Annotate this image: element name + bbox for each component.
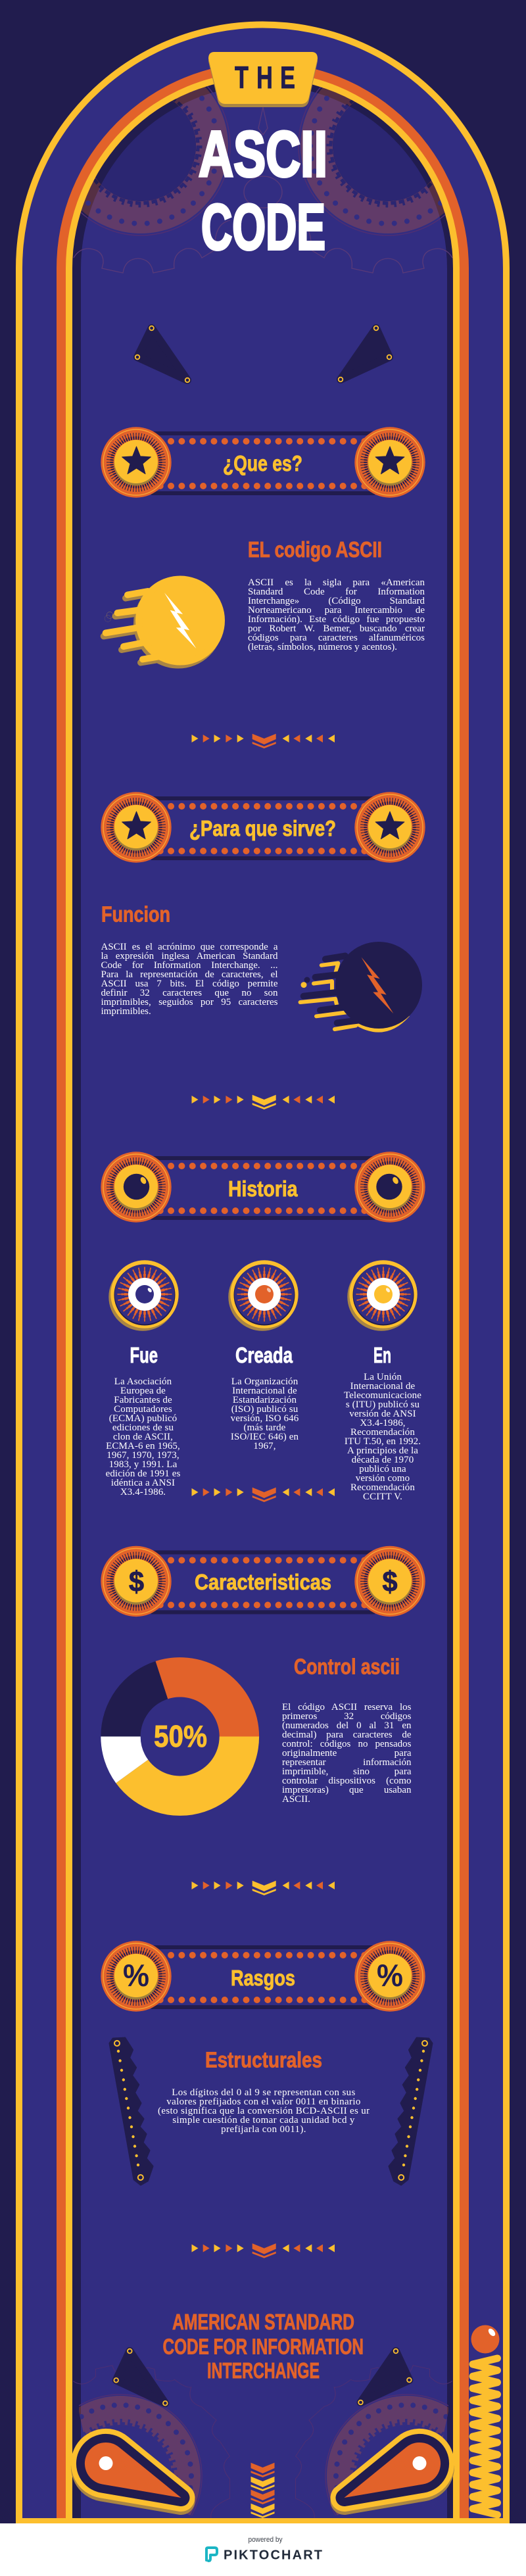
closing title: CODE FOR INFORMATION	[163, 2335, 364, 2360]
text: En	[332, 1373, 433, 1504]
text: Control ascii: imprimible, sino para	[282, 1766, 412, 1777]
text: En: versión de ANSI	[349, 1409, 416, 1419]
text: Estructurales: simple cuestión de tomar cada unidad bcd y	[172, 2115, 355, 2126]
text: Funcion: ASCII usa 7 bits. El código permite	[101, 979, 277, 989]
heading: El codigo ASCII: EL codigo ASCII	[248, 538, 382, 562]
text: Control ascii: decimal) para caracteres de	[282, 1730, 412, 1740]
closing title: INTERCHANGE	[207, 2359, 320, 2383]
text: En: Internacional de	[350, 1381, 415, 1392]
text: Control ascii: primeros 32 códigos	[282, 1711, 412, 1722]
title plate: THE	[208, 52, 318, 107]
top gears	[74, 85, 452, 274]
text: Funcion: definir 32 caracteres que no son	[101, 988, 277, 998]
title plate: THE: THE	[235, 61, 295, 95]
rail left	[110, 2038, 153, 2185]
text: El codigo ASCII: por Robert W. Bemer, buscando crear	[248, 623, 425, 634]
text: Fue: 1983, y 1991. La	[109, 1459, 177, 1470]
icon: star left	[122, 447, 151, 474]
heading: Que es: ¿Que es?	[223, 452, 302, 476]
section banner: Para que sirve	[101, 792, 425, 863]
icon: star right	[375, 447, 404, 474]
icon: dark lightning coin	[300, 942, 422, 1033]
section banner: Que es	[101, 427, 425, 498]
heading: Rasgos: Rasgos	[231, 1966, 295, 1991]
text: Control ascii: controlar dispositivos (como	[282, 1776, 412, 1786]
panel: Control ascii	[101, 1655, 412, 1816]
text: Creada: (ISO) publicó su	[231, 1404, 298, 1415]
text: Creada: versión, ISO 646	[231, 1413, 299, 1424]
text: El codigo ASCII: Standard Code for Information	[248, 587, 425, 597]
footer background	[0, 2523, 526, 2576]
text: Funcion: Code for Information Interchange. ...	[101, 960, 277, 971]
text: Estructurales: valores prefijados con el valor 0011 en binario	[166, 2097, 361, 2107]
text: Creada	[214, 1377, 316, 1453]
heading: Funcion: Funcion	[101, 903, 170, 927]
text: En: A principios de la	[347, 1446, 418, 1456]
text: Control ascii: impresoras) que usaban	[282, 1785, 412, 1795]
icon: eye right	[376, 1174, 402, 1200]
closing title	[163, 2310, 364, 2383]
heading: Control ascii: Control ascii	[294, 1655, 400, 1680]
main title: ASCII CODE	[199, 118, 327, 263]
flipper left	[85, 2442, 181, 2501]
icon: eye left	[124, 1174, 149, 1200]
text: Funcion	[101, 942, 277, 1017]
text: Creada: Internacional de	[232, 1386, 297, 1396]
text: Control ascii: representar información	[282, 1757, 412, 1768]
icon: medal yellow	[347, 1260, 418, 1331]
main title: ASCII CODE: CODE	[201, 191, 325, 263]
icon: yellow lightning coin	[104, 579, 222, 666]
text: Fue: clon de ASCII,	[113, 1432, 173, 1442]
heading: Para que sirve: ¿Para que sirve?	[189, 817, 336, 841]
text: Control ascii: ASCII.	[282, 1794, 310, 1805]
divider 3	[192, 1488, 335, 1502]
text: Fue: (ECMA) publicó	[109, 1413, 177, 1424]
divider 4	[192, 1881, 335, 1895]
text: Estructurales: prefijarla con 0011).	[221, 2124, 306, 2135]
text: En: publicó una	[359, 1464, 406, 1474]
rail right	[389, 2038, 432, 2185]
icon: star right	[375, 812, 404, 839]
column: Fue	[92, 1260, 194, 1502]
panel: Estructurales	[110, 2038, 432, 2185]
footer caption: powered by	[249, 2536, 283, 2544]
text: Funcion: imprimibles, seguidos por 95 caracteres	[101, 997, 277, 1008]
donut value: 50%	[154, 1719, 207, 1753]
heading: Historia: Historia	[228, 1177, 298, 1202]
icon: percent left: %	[123, 1958, 149, 1993]
slingshot triangle: top right	[339, 326, 391, 381]
text: Creada: Estandarización	[233, 1395, 297, 1405]
text: En: Recomendación	[350, 1482, 415, 1493]
icon: medal orange	[228, 1260, 299, 1331]
section banner: Historia	[101, 1152, 425, 1223]
text: Control ascii: originalmente para	[282, 1748, 412, 1759]
text: Fue: Fabricantes de	[114, 1395, 172, 1405]
flipper right	[345, 2442, 441, 2501]
divider 2	[192, 1095, 335, 1109]
closing title: AMERICAN STANDARD	[172, 2310, 354, 2335]
text: Funcion: la expresión inglesa American Standard	[101, 951, 277, 961]
heading: Caracteristicas: Caracteristicas	[195, 1570, 331, 1595]
text: Fue	[92, 1377, 194, 1502]
text: Fue: X3.4-1986.	[120, 1487, 166, 1497]
slingshot triangle: bottom left	[114, 2349, 168, 2406]
text: El codigo ASCII: (letras, símbolos, números y acentos).	[248, 642, 397, 652]
divider 1	[192, 734, 335, 748]
text: El codigo ASCII: Norteamericano para Intercambio de	[248, 605, 425, 616]
text: En: ITU T.50, en 1992.	[345, 1436, 421, 1447]
text: Creada: ISO/IEC 646) en	[231, 1432, 299, 1442]
text: En: X3.4-1986,	[360, 1418, 406, 1428]
text: Control ascii: control: códigos no pensados	[282, 1739, 412, 1749]
plunger ball	[471, 2325, 500, 2353]
column: En	[332, 1260, 433, 1504]
divider 5	[192, 2243, 335, 2258]
slingshot triangle: top left	[135, 326, 189, 382]
text: Fue: Computadores	[114, 1404, 172, 1415]
text: El codigo ASCII: códigos para caracteres alfanuméricos	[248, 633, 425, 643]
slingshot triangle: bottom right	[358, 2349, 412, 2404]
icon: medal purple	[108, 1260, 179, 1331]
text: Fue: 1967, 1970, 1973,	[107, 1450, 179, 1461]
column: Creada	[214, 1260, 316, 1453]
text: Funcion: Para la representación de caracteres, el	[101, 969, 277, 980]
text: Fue: ediciones de su	[112, 1422, 174, 1433]
text: El codigo ASCII	[248, 578, 425, 653]
heading: En: En	[373, 1344, 391, 1368]
section banner: Caracteristicas	[101, 1546, 425, 1616]
text: Fue: ECMA-6 en 1965,	[106, 1441, 180, 1451]
text: Fue: idéntica a ANSI	[111, 1478, 175, 1488]
text: En: s (ITU) publicó su	[346, 1399, 419, 1410]
text: En: Telecomunicacione	[344, 1390, 421, 1401]
wordmark: PIKTOCHART	[224, 2548, 322, 2562]
text: El codigo ASCII: Información). Este código fue propuesto	[248, 614, 425, 625]
bottom gears	[39, 2366, 489, 2558]
icon: dollar left: $	[129, 1566, 144, 1598]
text: Control ascii	[282, 1703, 412, 1805]
main title: ASCII CODE: ASCII	[199, 118, 327, 190]
text: Creada: 1967,	[253, 1441, 276, 1451]
text: Funcion: imprimibles.	[101, 1006, 151, 1017]
heading: Creada: Creada	[235, 1344, 293, 1368]
plunger spring	[473, 2358, 497, 2515]
panel: Funcion	[101, 903, 422, 1033]
icon: star left	[122, 812, 151, 839]
text: En: versión como	[356, 1473, 410, 1484]
text: Fue: edición de 1991 es	[106, 1469, 180, 1479]
text: El codigo ASCII: Interchange» (Código Standard	[248, 596, 425, 606]
text: Fue: Europea de	[120, 1386, 166, 1396]
text: En: CCITT V.	[363, 1492, 402, 1502]
heading: Fue: Fue	[130, 1344, 158, 1368]
cabinet bottom edge	[16, 2518, 510, 2523]
text: En: década de 1970	[352, 1455, 414, 1465]
footer: powered by Piktochart	[206, 2536, 322, 2562]
text: Creada: (más tarde	[244, 1422, 285, 1433]
icon: dollar right: $	[383, 1566, 397, 1598]
icon: percent right: %	[377, 1958, 403, 1993]
section banner: Rasgos	[101, 1941, 425, 2012]
donut chart	[101, 1657, 259, 1816]
heading: Estructurales: Estructurales	[205, 2049, 322, 2073]
text: Estructurales	[158, 2088, 370, 2135]
text: En: Recomendación	[350, 1427, 415, 1438]
chevron stack	[251, 2463, 275, 2518]
text: Control ascii: (numerados del 0 al 31 en	[282, 1720, 412, 1731]
panel: El codigo ASCII	[104, 538, 425, 666]
icon: Piktochart logo	[206, 2548, 217, 2561]
